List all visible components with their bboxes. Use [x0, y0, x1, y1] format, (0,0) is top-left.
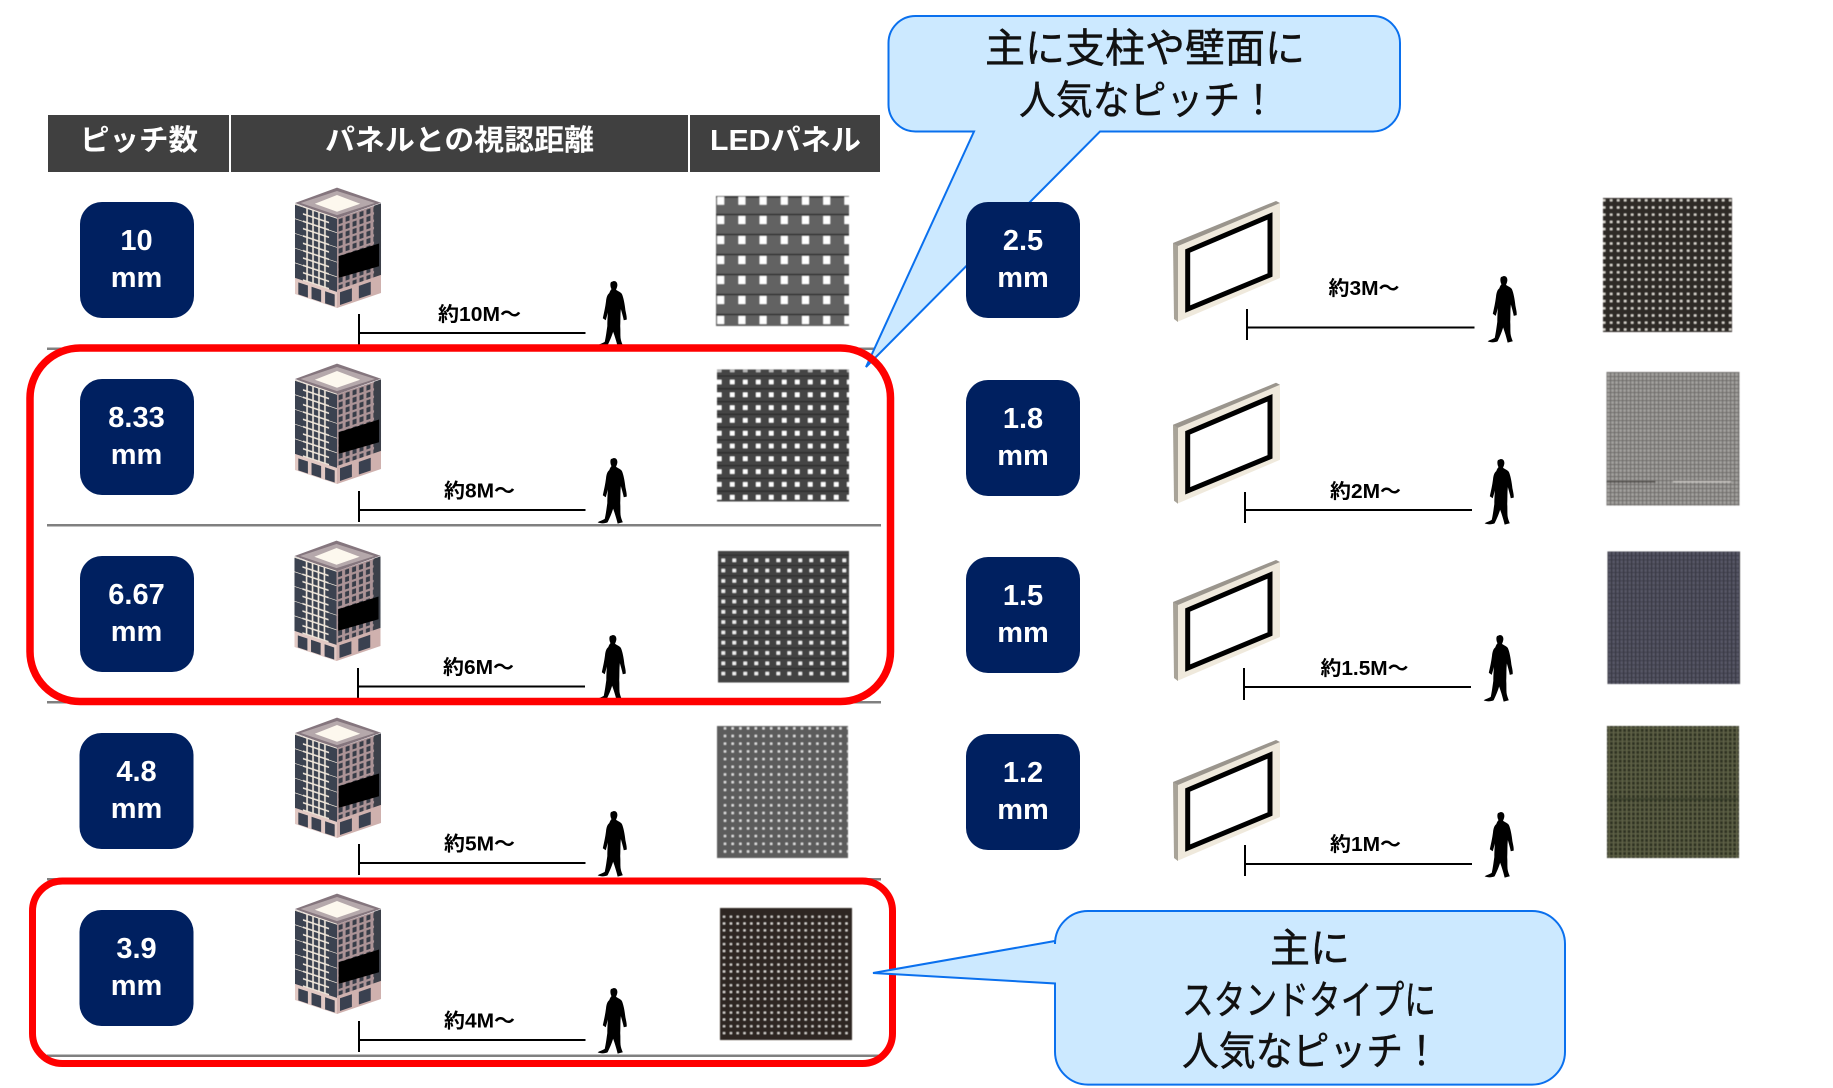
row: 1.8 mm [966, 372, 1740, 525]
pitch badge 3.9 mm: mm [111, 970, 162, 1002]
LED panel texture [718, 551, 849, 682]
icon: person [597, 635, 626, 701]
header: pitch count [48, 115, 229, 172]
pitch badge 1.5 mm [966, 557, 1080, 673]
LED panel texture [1608, 552, 1740, 684]
pitch badge 1.8 mm [966, 380, 1080, 496]
LED panel texture [1606, 372, 1740, 506]
icon: building [295, 718, 381, 838]
row: 8.33 mm [80, 364, 849, 524]
callout: popular pitch for pillars and walls: 人気なピッチ！ [1019, 79, 1277, 123]
distance label: 約10M～ [438, 303, 521, 326]
highlight: red frame around 8.33 and 6.67 mm rows [30, 348, 890, 702]
pitch badge 1.8 mm: mm [997, 440, 1049, 472]
icon: building [294, 541, 381, 661]
icon: wall frame [1173, 201, 1280, 322]
icon: person [1488, 276, 1517, 343]
pitch badge 1.5 mm: 1.5 [1003, 580, 1043, 612]
icon: building [295, 894, 381, 1014]
distance label: 約8M～ [444, 480, 515, 502]
distance label: 約1.5M～ [1320, 657, 1408, 680]
pitch badge 1.5 mm: mm [997, 617, 1049, 649]
distance line [1244, 668, 1471, 700]
header: LED panel [690, 115, 880, 172]
pitch badge 4.8 mm [80, 733, 194, 849]
icon: wall frame [1173, 383, 1280, 504]
pitch badge 1.8 mm: 1.8 [1003, 403, 1043, 435]
pitch badge 6.67 mm: 6.67 [108, 579, 165, 611]
row: 4.8 mm [80, 718, 848, 877]
header: LED panel: LEDパネル [710, 125, 861, 157]
callout: popular pitch for pillars and walls [866, 16, 1400, 367]
row: 1.5 mm [966, 552, 1740, 702]
LED panel texture [717, 726, 848, 858]
pitch badge 6.67 mm [80, 556, 194, 672]
header: viewing distance: パネルとの視認距離 [325, 124, 594, 157]
pitch badge 8.33 mm: mm [111, 439, 162, 471]
pitch badge 10 mm: mm [111, 262, 162, 294]
pitch badge 3.9 mm: 3.9 [116, 933, 157, 965]
pitch badge 8.33 mm [80, 379, 194, 495]
row: 6.67 mm [80, 541, 849, 701]
row: 10 mm [80, 188, 849, 349]
distance line [359, 491, 586, 522]
icon: building [295, 364, 381, 484]
icon: building [295, 188, 381, 308]
pitch badge 8.33 mm: 8.33 [108, 402, 165, 434]
pitch badge 2.5 mm: 2.5 [1003, 225, 1043, 257]
icon: person [1485, 459, 1514, 525]
pitch badge 1.2 mm [966, 734, 1080, 850]
LED panel texture [1607, 726, 1739, 858]
row: 1.2 mm [966, 726, 1739, 878]
pitch badge 3.9 mm [80, 910, 194, 1026]
row: 3.9 mm [80, 894, 852, 1054]
pitch badge 1.2 mm: 1.2 [1003, 757, 1043, 789]
distance line [359, 844, 586, 875]
LED panel texture [1603, 198, 1732, 332]
pitch badge 4.8 mm: 4.8 [116, 756, 157, 788]
pitch badge 2.5 mm [966, 202, 1080, 318]
pitch badge 4.8 mm: mm [111, 793, 162, 825]
icon: wall frame [1173, 560, 1280, 681]
icon: person [598, 458, 627, 524]
distance label: 約3M～ [1328, 277, 1400, 300]
distance label: 約1M～ [1330, 833, 1401, 856]
distance label: 約6M～ [443, 656, 514, 679]
LED panel texture [717, 370, 849, 502]
callout: popular pitch for stand type: スタンドタイプに [1182, 979, 1436, 1023]
pitch badge 2.5 mm: mm [997, 262, 1049, 294]
LED panel texture [720, 908, 852, 1040]
icon: person [598, 811, 627, 877]
callout: popular pitch for pillars and walls: 主に支柱や壁面に [985, 27, 1305, 71]
distance line [1245, 845, 1472, 876]
pitch badge 6.67 mm: mm [111, 616, 162, 648]
pitch badge 10 mm [80, 202, 194, 318]
icon: person [598, 281, 627, 347]
icon: wall frame [1173, 740, 1280, 861]
distance line [1245, 492, 1472, 523]
header: viewing distance [231, 115, 688, 172]
distance label: 約4M～ [444, 1010, 515, 1032]
callout: popular pitch for stand type: 主に [1270, 927, 1350, 971]
distance line [358, 668, 585, 700]
distance line [359, 314, 586, 349]
distance label: 約5M～ [444, 832, 515, 856]
distance line [359, 1021, 586, 1052]
distance line [1247, 309, 1474, 340]
callout: popular pitch for stand type: 人気なピッチ！ [1182, 1030, 1440, 1074]
distance label: 約2M～ [1330, 480, 1401, 503]
row: 2.5 mm [966, 198, 1732, 343]
callout: popular pitch for stand type [873, 911, 1565, 1085]
icon: person [598, 988, 627, 1054]
LED panel texture [716, 196, 849, 326]
icon: person [1484, 635, 1513, 702]
pitch badge 1.2 mm: mm [997, 794, 1049, 826]
header: pitch count: ピッチ数 [80, 124, 198, 157]
pitch badge 10 mm: 10 [120, 225, 153, 257]
icon: person [1485, 812, 1514, 878]
highlight: red frame around 3.9 mm row [32, 881, 892, 1064]
